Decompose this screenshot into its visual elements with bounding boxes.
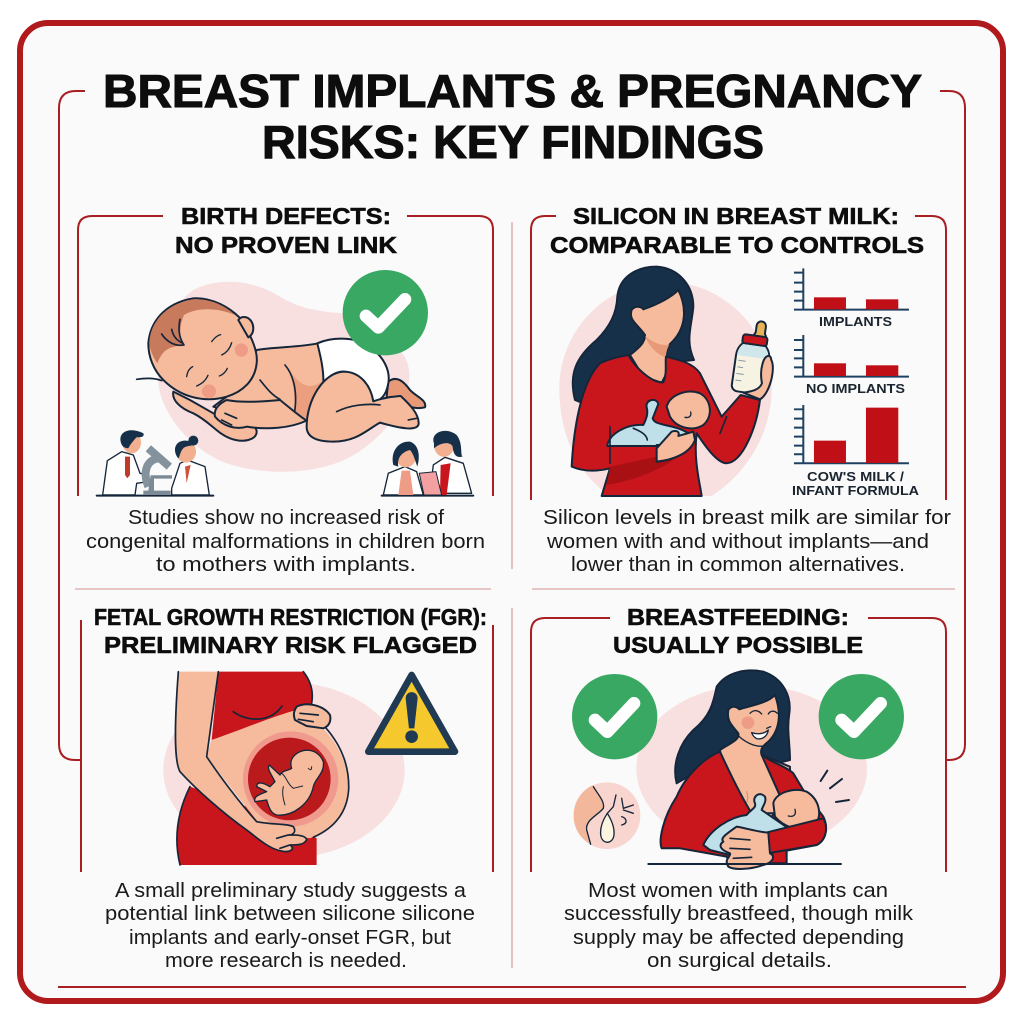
text: FGR finding: implants and early-onset FGR, but — [129, 926, 451, 949]
text: birth defects finding: to mothers with implants. — [156, 553, 416, 576]
panel: breastfeeding — [531, 604, 946, 972]
text: birth defects finding: Studies show no increased risk of — [128, 506, 444, 529]
panel: silicon in breast milk — [531, 203, 951, 576]
title: RISKS: KEY FINDINGS — [262, 116, 764, 168]
illustration: mother with baby and bottle — [559, 267, 774, 496]
illustration: smiling mother breastfeeding — [636, 670, 867, 869]
chart: no implants — [794, 335, 909, 377]
text: silicon finding: Silicon levels in breast milk are similar for — [543, 506, 951, 529]
icon: breast duct and milk drop — [574, 782, 640, 849]
icon: warning triangle — [368, 675, 455, 752]
text: FGR finding: more research is needed. — [165, 949, 407, 972]
heading: fetal growth restriction: PRELIMINARY RISK FLAGGED — [104, 632, 477, 658]
heading: silicon in breast milk — [550, 203, 924, 258]
text: breastfeeding finding — [564, 879, 914, 972]
heading: birth defects: NO PROVEN LINK — [175, 232, 397, 258]
heading: breastfeeding: BREASTFEEDING: — [627, 604, 849, 630]
label: cow's milk and infant formula: INFANT FORMULA — [792, 483, 920, 498]
text: silicon finding: women with and without implants—and — [546, 530, 929, 553]
heading: breastfeeding — [613, 604, 863, 658]
text: birth defects finding — [86, 506, 485, 576]
label: no implants: NO IMPLANTS — [806, 381, 905, 396]
title: BREAST IMPLANTS & PREGNANCY — [103, 65, 922, 117]
text: silicon finding — [543, 506, 951, 576]
chart: cow's milk and formula — [794, 405, 909, 463]
illustration: sleeping baby — [137, 282, 425, 472]
title — [103, 65, 922, 168]
text: breastfeeding finding: supply may be affected depending — [573, 926, 904, 949]
label: cow's milk and infant formula: COW'S MILK / — [807, 469, 904, 484]
text: FGR finding — [105, 879, 475, 972]
text: FGR finding: potential link between silicone silicone — [105, 902, 475, 925]
icon: green check — [343, 270, 428, 355]
panel: fetal growth restriction — [81, 604, 493, 972]
text: breastfeeding finding: on surgical details. — [647, 949, 832, 972]
text: FGR finding: A small preliminary study suggests a — [115, 879, 467, 902]
text: silicon finding: lower than in common alternatives. — [571, 553, 905, 576]
heading: breastfeeding: USUALLY POSSIBLE — [613, 632, 863, 658]
heading: silicon in breast milk: COMPARABLE TO CONTROLS — [550, 232, 924, 258]
icon: right green check — [819, 674, 904, 759]
label: implants: IMPLANTS — [819, 314, 892, 329]
heading: silicon in breast milk: SILICON IN BREAST MILK: — [573, 203, 899, 229]
illustration: scientists with microscope — [97, 430, 473, 496]
heading: fetal growth restriction — [94, 604, 487, 658]
text: breastfeeding finding: Most women with implants can — [588, 879, 888, 902]
label: cow's milk and infant formula — [792, 469, 920, 498]
heading: birth defects — [175, 203, 397, 258]
panel: birth defects — [78, 203, 493, 576]
text: birth defects finding: congenital malformations in children born — [86, 530, 485, 553]
chart: implants — [794, 268, 909, 310]
icon: left green check — [572, 674, 657, 759]
text: breastfeeding finding: successfully breastfeed, though milk — [564, 902, 914, 925]
illustration: pregnant belly with fetus — [163, 672, 405, 865]
heading: fetal growth restriction: FETAL GROWTH RESTRICTION (FGR): — [94, 604, 487, 630]
heading: birth defects: BIRTH DEFECTS: — [181, 203, 391, 229]
